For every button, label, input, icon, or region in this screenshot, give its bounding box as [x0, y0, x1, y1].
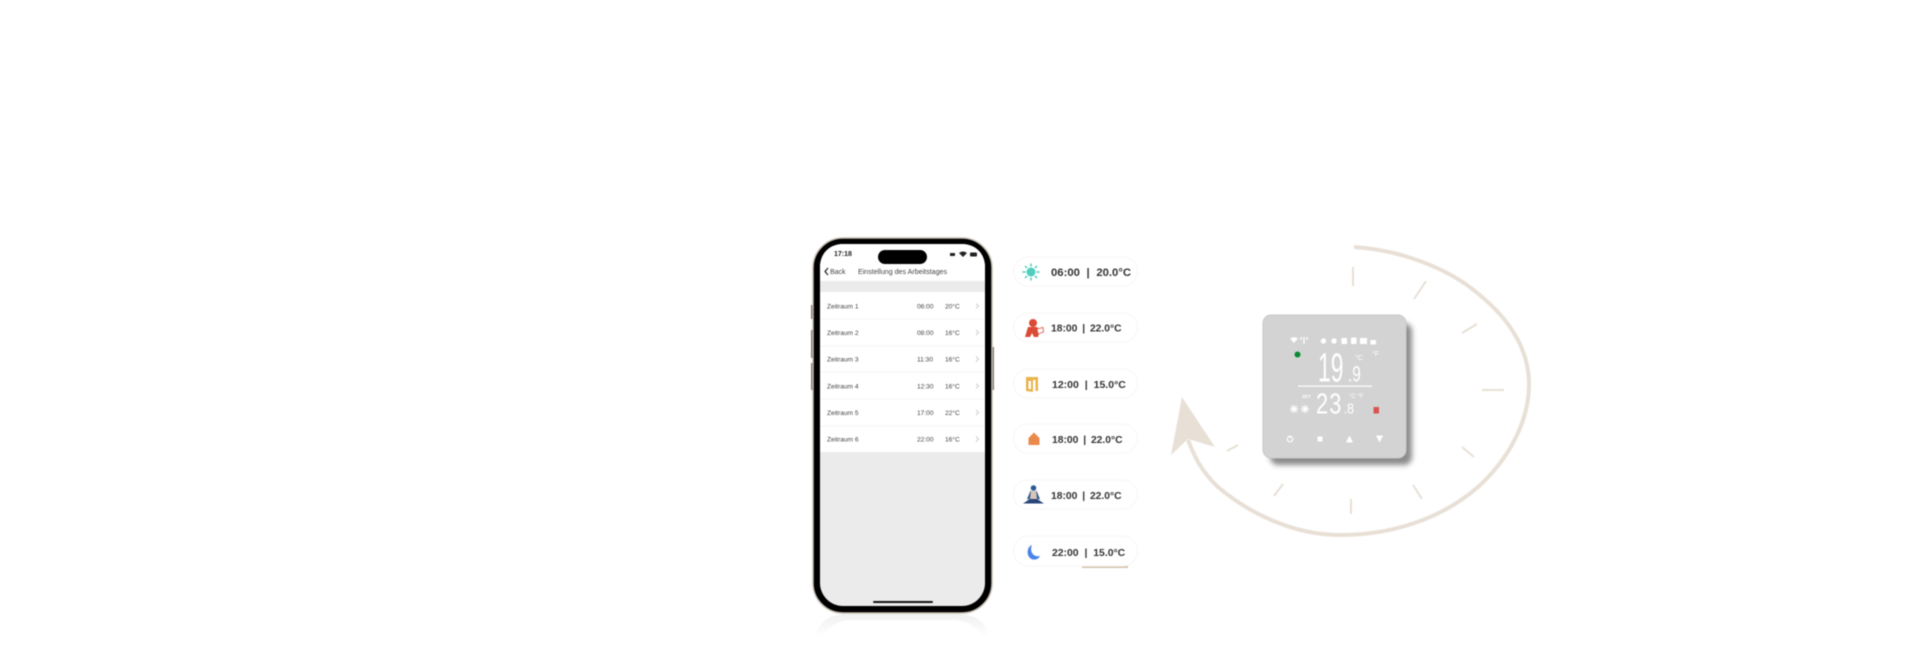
menu button — [1318, 436, 1322, 442]
row 2 — [827, 329, 978, 337]
pill 2: leaving — [1014, 313, 1138, 342]
pill time and temperature: 22:00 | 15.0°C — [1052, 548, 1126, 559]
down button — [1376, 436, 1383, 442]
row 1: 20°C — [945, 302, 960, 310]
phone body — [813, 238, 992, 613]
pill tan edge — [1082, 566, 1128, 568]
row 6: Zeitraum 6 — [827, 436, 859, 444]
pill time and temperature: 18:00 | 22.0°C — [1051, 491, 1122, 502]
row 1 — [827, 302, 978, 310]
row 5: 22°C — [945, 409, 960, 417]
phone reflection — [816, 614, 989, 636]
power button — [1287, 436, 1293, 442]
arrow head — [1171, 397, 1215, 455]
smartphone with schedule app — [811, 238, 994, 613]
phone side buttons — [811, 305, 994, 390]
SET label: SET — [1302, 394, 1311, 399]
schedule pills — [1014, 257, 1138, 568]
schedule list — [820, 292, 985, 452]
row 5: 17:00 — [917, 410, 934, 417]
set temperature: 23 — [1316, 389, 1342, 420]
icon: sun — [1022, 264, 1040, 280]
row 6: 16°C — [945, 436, 960, 444]
row 5 — [827, 409, 978, 417]
back button: Back — [830, 269, 846, 276]
pill time and temperature: 18:00 | 22.0°C — [1052, 435, 1123, 446]
up button — [1346, 436, 1353, 442]
dynamic island — [878, 250, 927, 264]
row 2: 16°C — [945, 329, 960, 337]
green status dot — [1294, 352, 1300, 358]
touch buttons — [1287, 436, 1383, 442]
icon: moon — [1028, 545, 1040, 560]
icon: person red — [1025, 319, 1044, 337]
status time: 17:18 — [834, 251, 852, 258]
divider — [1298, 386, 1372, 387]
set temperature decimal: .8 — [1344, 399, 1354, 417]
pill 4: home — [1014, 424, 1138, 453]
row 5: Zeitraum 5 — [827, 410, 859, 417]
pill time and temperature: 06:00 | 20.0°C — [1051, 267, 1131, 279]
thermostat shadow — [1270, 323, 1412, 465]
room unit celsius: °C — [1355, 354, 1363, 362]
row 1: Zeitraum 1 — [827, 304, 859, 310]
row 6: 22:00 — [917, 436, 934, 444]
app header — [820, 244, 985, 281]
fan icon top: °F — [1372, 350, 1379, 358]
pill 1: morning — [1014, 257, 1138, 286]
row 3: Zeitraum 3 — [827, 356, 859, 364]
cycle arrow — [1171, 247, 1529, 535]
row 4: 16°C — [945, 382, 960, 390]
row 2: 08:00 — [917, 330, 934, 337]
thermostat body — [1263, 315, 1406, 458]
room temperature: 19 — [1318, 346, 1344, 391]
row 3 — [827, 356, 978, 364]
row 4 — [827, 382, 978, 390]
row 4: 12:30 — [917, 384, 934, 390]
phone screen — [820, 244, 985, 606]
heating indicator — [1374, 407, 1379, 414]
pill 3: away — [1014, 369, 1138, 398]
row 2: Zeitraum 2 — [827, 330, 859, 337]
set units: °C °F — [1349, 394, 1364, 400]
screen title: Einstellung des Arbeitstages — [858, 269, 947, 276]
status icons row — [1290, 337, 1376, 344]
row 3: 16°C — [945, 356, 960, 364]
back button — [825, 268, 846, 276]
arrow arc — [1188, 247, 1529, 535]
pill time and temperature: 12:00 | 15.0°C — [1052, 379, 1126, 391]
icon: meditating figure — [1023, 485, 1044, 504]
row 6 — [827, 436, 978, 444]
heat and cool icons — [1290, 405, 1309, 413]
home indicator — [873, 601, 933, 603]
room temperature decimal: .9 — [1348, 363, 1361, 387]
status icons — [950, 252, 977, 257]
pill 6: night — [1014, 536, 1138, 566]
thermostat — [1263, 315, 1412, 465]
row 3: 11:30 — [917, 356, 933, 364]
icon: door — [1026, 377, 1038, 392]
row 4: Zeitraum 4 — [827, 384, 859, 390]
clock tick marks — [1227, 267, 1504, 514]
icon: house — [1028, 432, 1040, 445]
pill 5: relax — [1014, 480, 1138, 509]
row 1: 06:00 — [917, 304, 934, 310]
pill time and temperature: 18:00 | 22.0°C — [1051, 324, 1122, 334]
